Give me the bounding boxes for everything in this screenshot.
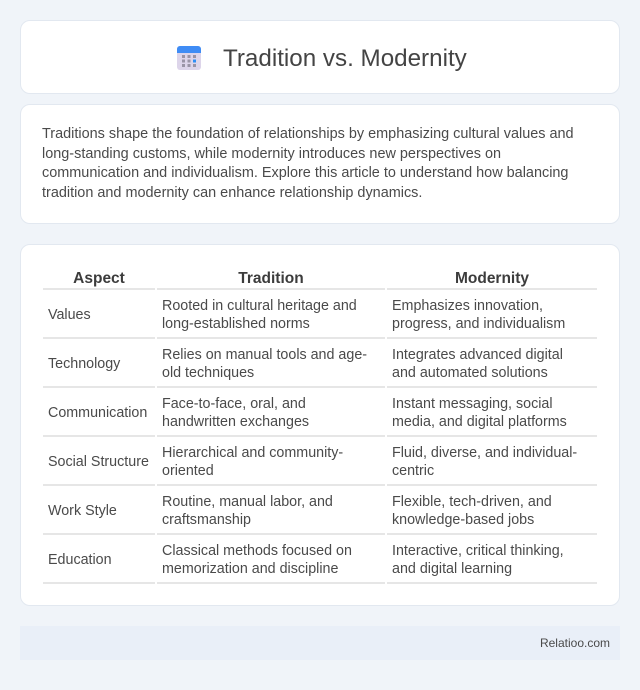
table: comparison: old techniques — [162, 365, 254, 381]
table: comparison: progress, and individualism — [392, 316, 565, 332]
table: comparison: Rooted in cultural heritage and — [162, 298, 357, 314]
table: comparison: Interactive, critical thinking, — [392, 543, 564, 559]
row: Technology — [48, 347, 563, 381]
text block: introduction: Traditions shape the foundation of relationships by emphasizing cultural values and — [42, 126, 574, 142]
column heading: Aspect: Aspect — [73, 270, 125, 287]
row: Education — [48, 543, 564, 577]
table: comparison: Fluid, diverse, and individual- — [392, 445, 577, 461]
footer — [20, 626, 620, 660]
table: comparison: Values — [48, 307, 91, 323]
table: comparison: Integrates advanced digital — [392, 347, 563, 363]
table: comparison: Classical methods focused on — [162, 543, 352, 559]
table: comparison: media, and digital platforms — [392, 414, 567, 430]
panel: header — [20, 20, 620, 94]
table: comparison: Work Style — [48, 503, 117, 519]
text block: introduction — [42, 126, 574, 200]
table: comparison: handwritten exchanges — [162, 414, 309, 430]
panel: introduction — [20, 104, 620, 224]
column heading: Tradition: Tradition — [238, 270, 304, 287]
table: comparison: knowledge-based jobs — [392, 512, 534, 528]
table: comparison: Flexible, tech-driven, and — [392, 494, 552, 510]
table: comparison: Instant messaging, social — [392, 396, 553, 412]
table: comparison: craftsmanship — [162, 512, 251, 528]
table: comparison: Technology — [48, 356, 120, 372]
row: Social Structure — [48, 445, 577, 479]
table: comparison: and automated solutions — [392, 365, 548, 381]
row: Communication — [48, 396, 567, 430]
table: comparison: centric — [392, 463, 434, 479]
table: comparison: oriented — [162, 463, 214, 479]
row: Values — [48, 298, 565, 332]
table: comparison: long-established norms — [162, 316, 310, 332]
table: comparison: Communication — [48, 405, 147, 421]
table: comparison: Hierarchical and community- — [162, 445, 343, 461]
column heading: Modernity: Modernity — [455, 270, 529, 287]
table: comparison: Social Structure — [48, 454, 149, 470]
table: comparison: Emphasizes innovation, — [392, 298, 543, 314]
table: comparison: Routine, manual labor, and — [162, 494, 333, 510]
text block: introduction: tradition and modernity can enhance relationship dynamics. — [42, 184, 422, 200]
table: comparison: memorization and discipline — [162, 561, 338, 577]
footer credit: Relatioo.com — [540, 636, 610, 650]
row: Work Style — [48, 494, 552, 528]
icon: calendar — [177, 46, 201, 70]
text block: introduction: communication and individualism. Explore this article to understand how balancing — [42, 165, 568, 181]
text block: introduction: long-standing customs, while modernity introduces new perspectives on — [42, 146, 501, 162]
table: comparison: Face-to-face, oral, and — [162, 396, 306, 412]
table: comparison: Education — [48, 552, 112, 568]
title: Tradition vs. Modernity — [223, 45, 467, 72]
panel: comparison table — [20, 244, 620, 606]
table: comparison: and digital learning — [392, 561, 512, 577]
table: comparison: Relies on manual tools and age- — [162, 347, 367, 363]
